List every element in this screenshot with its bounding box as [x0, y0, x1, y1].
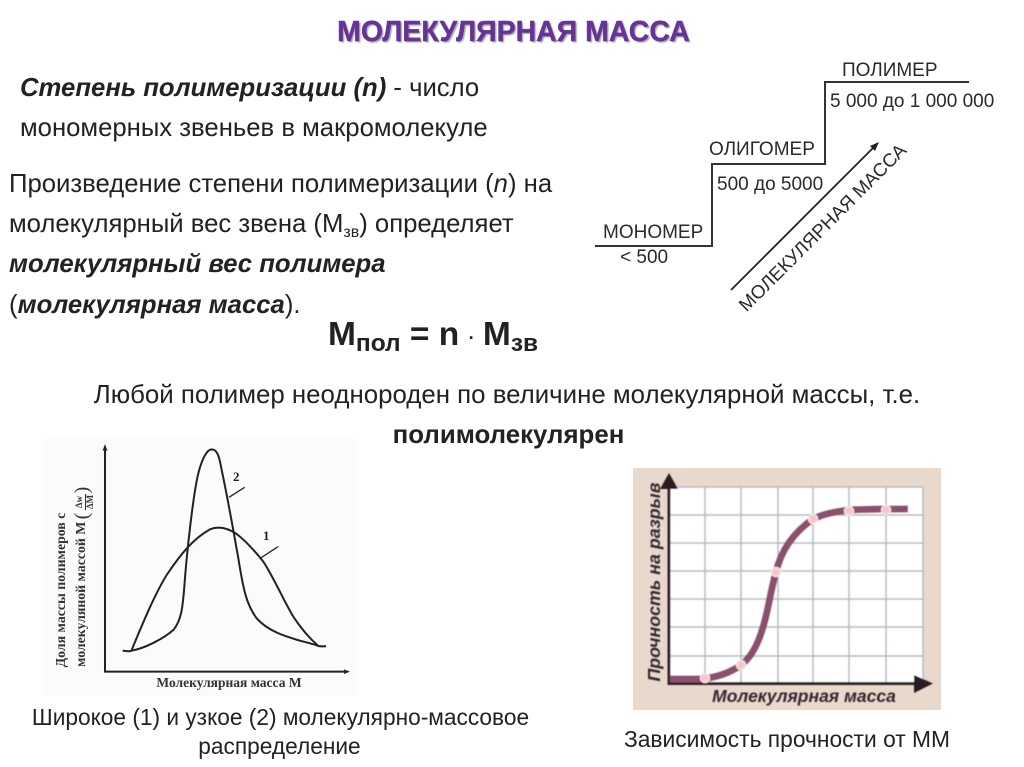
- formula: М: [328, 316, 356, 353]
- data points: [700, 506, 890, 682]
- text block: molecular weight definition: зв: [343, 224, 359, 241]
- text block: polymolecularity: Любой полимер неоднороден по величине молекулярной массы, т.е.: [94, 381, 920, 409]
- curve 1 broad: [132, 528, 318, 650]
- strength curve: [670, 509, 908, 679]
- chart: strength vs molecular mass: [633, 468, 941, 710]
- staircase line: [595, 82, 969, 246]
- curve number labels: 1: [263, 528, 270, 543]
- text block: polymolecularity: [94, 381, 920, 449]
- y axis label: молекуляной массой М: [73, 522, 88, 667]
- curve 2 narrow: [123, 449, 326, 651]
- text block: molecular weight definition: [9, 170, 553, 319]
- formula: .: [469, 323, 474, 343]
- y axis label: Прочность на разрыв: [644, 482, 664, 681]
- y axis label: ): [71, 487, 93, 493]
- y axis label: (: [71, 512, 93, 519]
- stair labels: 5 000 до 1 000 000: [830, 91, 994, 112]
- caption: distribution: распределение: [198, 733, 361, 759]
- formula: пол: [356, 330, 401, 357]
- text block: molecular weight definition: молекулярный вес звена (М: [9, 210, 343, 238]
- text block: molecular weight definition: (молекулярная масса).: [9, 291, 301, 319]
- pointer lines: [229, 487, 278, 558]
- text block: molecular weight definition: ) определяет: [359, 210, 514, 238]
- y axis label: [53, 487, 95, 667]
- text block: degree of polymerization: Степень полимеризации (n) - число: [20, 74, 479, 102]
- text block: degree of polymerization: [20, 74, 488, 142]
- caption: distribution: [32, 704, 529, 759]
- formula: М: [474, 316, 511, 353]
- plot area: [670, 487, 923, 683]
- text block: molecular weight definition: молекулярный вес полимера: [9, 250, 386, 278]
- grid: [670, 487, 923, 683]
- text block: degree of polymerization: мономерных звеньев в макромолекуле: [20, 114, 488, 142]
- title: МОЛЕКУЛЯРНАЯ МАССА: [339, 18, 691, 50]
- axes: [669, 480, 925, 684]
- text block: molecular weight definition: Произведение степени полимеризации (n) на: [9, 170, 553, 198]
- caption: distribution: Широкое (1) и узкое (2) молекулярно-массовое: [32, 704, 529, 730]
- stair labels: ОЛИГОМЕР: [709, 139, 815, 160]
- staircase diagram: [595, 60, 994, 315]
- stair labels: < 500: [620, 247, 668, 268]
- y axis label: Доля массы полимеров с: [53, 513, 68, 667]
- y axis label: ΔM: [85, 494, 95, 509]
- axis arrowheads: [660, 473, 933, 693]
- stair labels: МОНОМЕР: [603, 222, 703, 243]
- axes: [105, 450, 345, 672]
- curve number labels: 2: [233, 469, 240, 484]
- caption: strength: Зависимость прочности от ММ: [624, 726, 950, 752]
- chart: molecular mass distribution: [43, 438, 357, 696]
- axis arrowheads: [103, 444, 350, 674]
- formula: зв: [511, 330, 538, 357]
- chart background: [633, 468, 941, 710]
- curve number labels: [233, 469, 270, 543]
- rotated label: МОЛЕКУЛЯРНАЯ МАССА: [734, 139, 911, 315]
- y axis label: Δw: [74, 495, 84, 508]
- stair labels: 500 до 5000: [717, 174, 823, 195]
- stair labels: [603, 60, 994, 268]
- title: МОЛЕКУЛЯРНАЯ МАССА: [337, 16, 690, 48]
- x axis label: Молекулярная масса М: [156, 675, 302, 690]
- arrow: molecular mass: [731, 142, 879, 290]
- x axis label: Молекулярная масса: [712, 686, 896, 706]
- formula: = n: [401, 316, 469, 353]
- stair labels: ПОЛИМЕР: [842, 60, 938, 81]
- text block: polymolecularity: полимолекулярен: [393, 421, 624, 449]
